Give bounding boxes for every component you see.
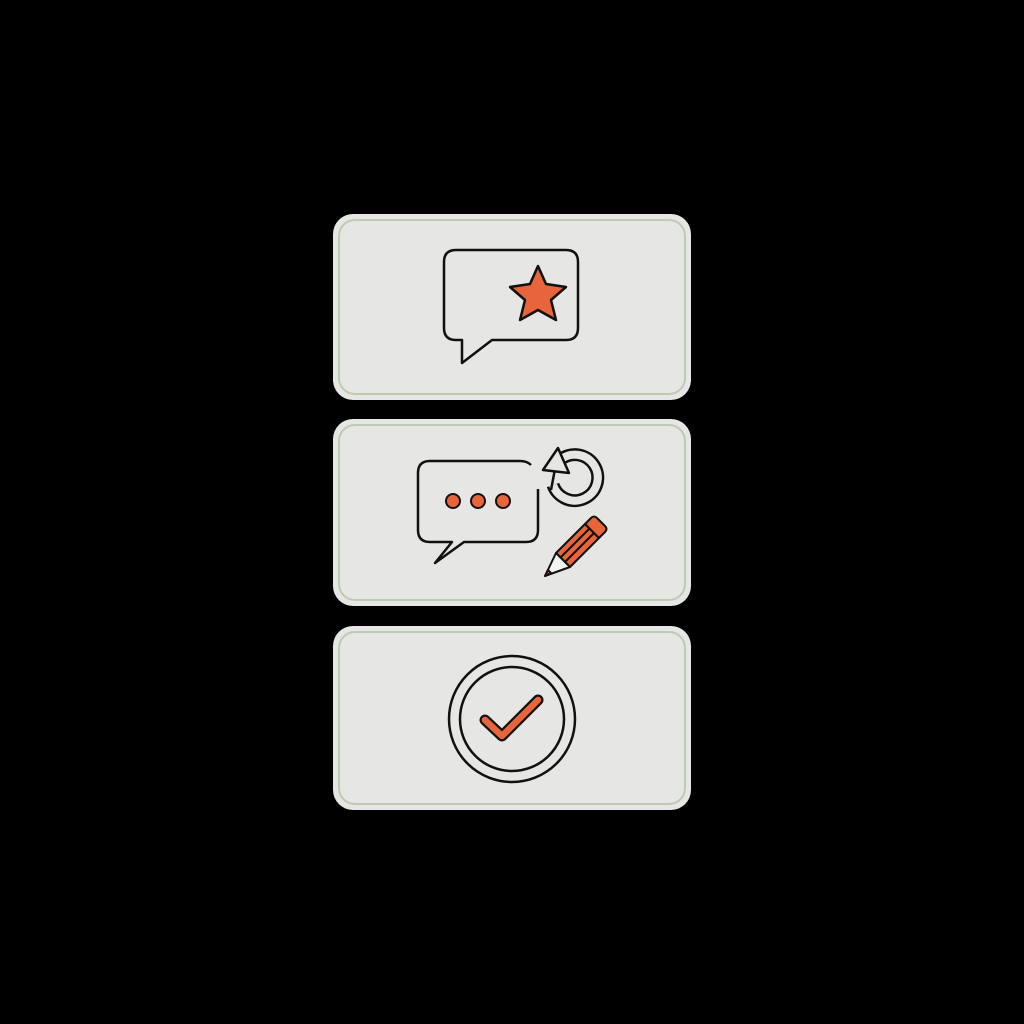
icon: speech bubble with star (444, 250, 578, 363)
icon: refresh arrow (543, 448, 598, 501)
icon: check circle (449, 656, 575, 782)
panel: card 2 feedback revision (333, 419, 691, 606)
icon: speech bubble with dots (418, 461, 538, 563)
panel: card 1 rating (333, 214, 691, 400)
icon: pencil (545, 516, 606, 576)
panel: card 3 approval (333, 626, 691, 810)
